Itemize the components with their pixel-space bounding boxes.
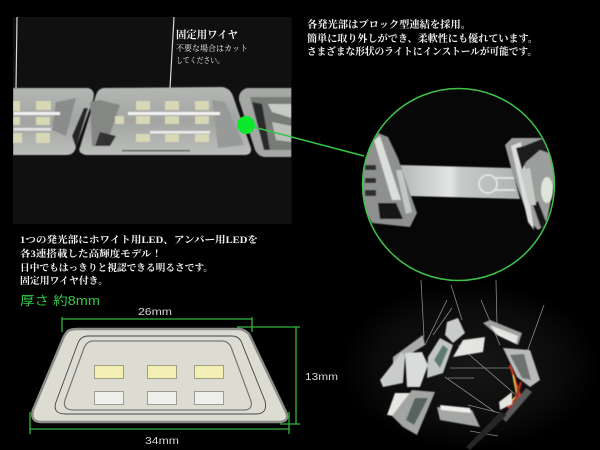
right connector block xyxy=(505,138,556,230)
hanging wires xyxy=(421,280,544,436)
panel: magnified connector circle xyxy=(362,88,556,280)
description: block connection: 各発光部はブロック型連結を採用。 xyxy=(307,18,471,31)
inner contour lines xyxy=(55,336,266,414)
description: LED specification: 1つの発光部にホワイト用LED、アンバー用LEDを xyxy=(20,233,258,246)
wire label: してください。 xyxy=(176,56,224,65)
wire label: 不要な場合はカット xyxy=(176,43,248,53)
wire label: 固定用ワイヤ xyxy=(176,28,238,41)
description: block connection xyxy=(307,18,538,58)
amber LEDs xyxy=(94,366,224,378)
dimension lines xyxy=(30,317,300,434)
wire label xyxy=(176,28,248,65)
green marker dot xyxy=(237,116,255,134)
panel: LED strip photo xyxy=(13,17,292,224)
white LEDs xyxy=(94,392,224,404)
description: block connection: さまざまな形状のライトにインストールが可能です。 xyxy=(307,45,537,58)
dimension labels: 13mm xyxy=(305,372,338,383)
circle outline xyxy=(362,88,554,280)
clear LED blocks xyxy=(380,318,540,435)
diagram: LED module dimensions xyxy=(30,307,338,447)
LED blocks xyxy=(13,87,292,157)
thickness heading: 厚さ 約8mm xyxy=(20,293,100,308)
description: LED specification: 各3連搭載した高輝度モデル！ xyxy=(20,247,162,260)
description: LED specification: 日中でもはっきりと視認できる明るさです。 xyxy=(20,261,213,274)
connector with coloured cable xyxy=(466,365,532,450)
photo: assembled LED ring xyxy=(340,280,600,450)
LED chips xyxy=(13,101,209,143)
description: LED specification xyxy=(20,233,258,287)
module outline xyxy=(32,329,287,422)
leader line xyxy=(246,125,364,156)
band rivet xyxy=(479,175,515,193)
description: block connection: 簡単に取り外しができ、柔軟性にも優れています。 xyxy=(307,32,538,45)
description: LED specification: 固定用ワイヤ付き。 xyxy=(20,274,108,287)
dimension labels: 26mm xyxy=(138,307,172,318)
flexible band xyxy=(400,165,520,199)
dimension labels xyxy=(138,307,338,447)
left connector block xyxy=(362,133,417,227)
fixing wires xyxy=(16,17,174,88)
dimension labels: 34mm xyxy=(145,436,179,447)
